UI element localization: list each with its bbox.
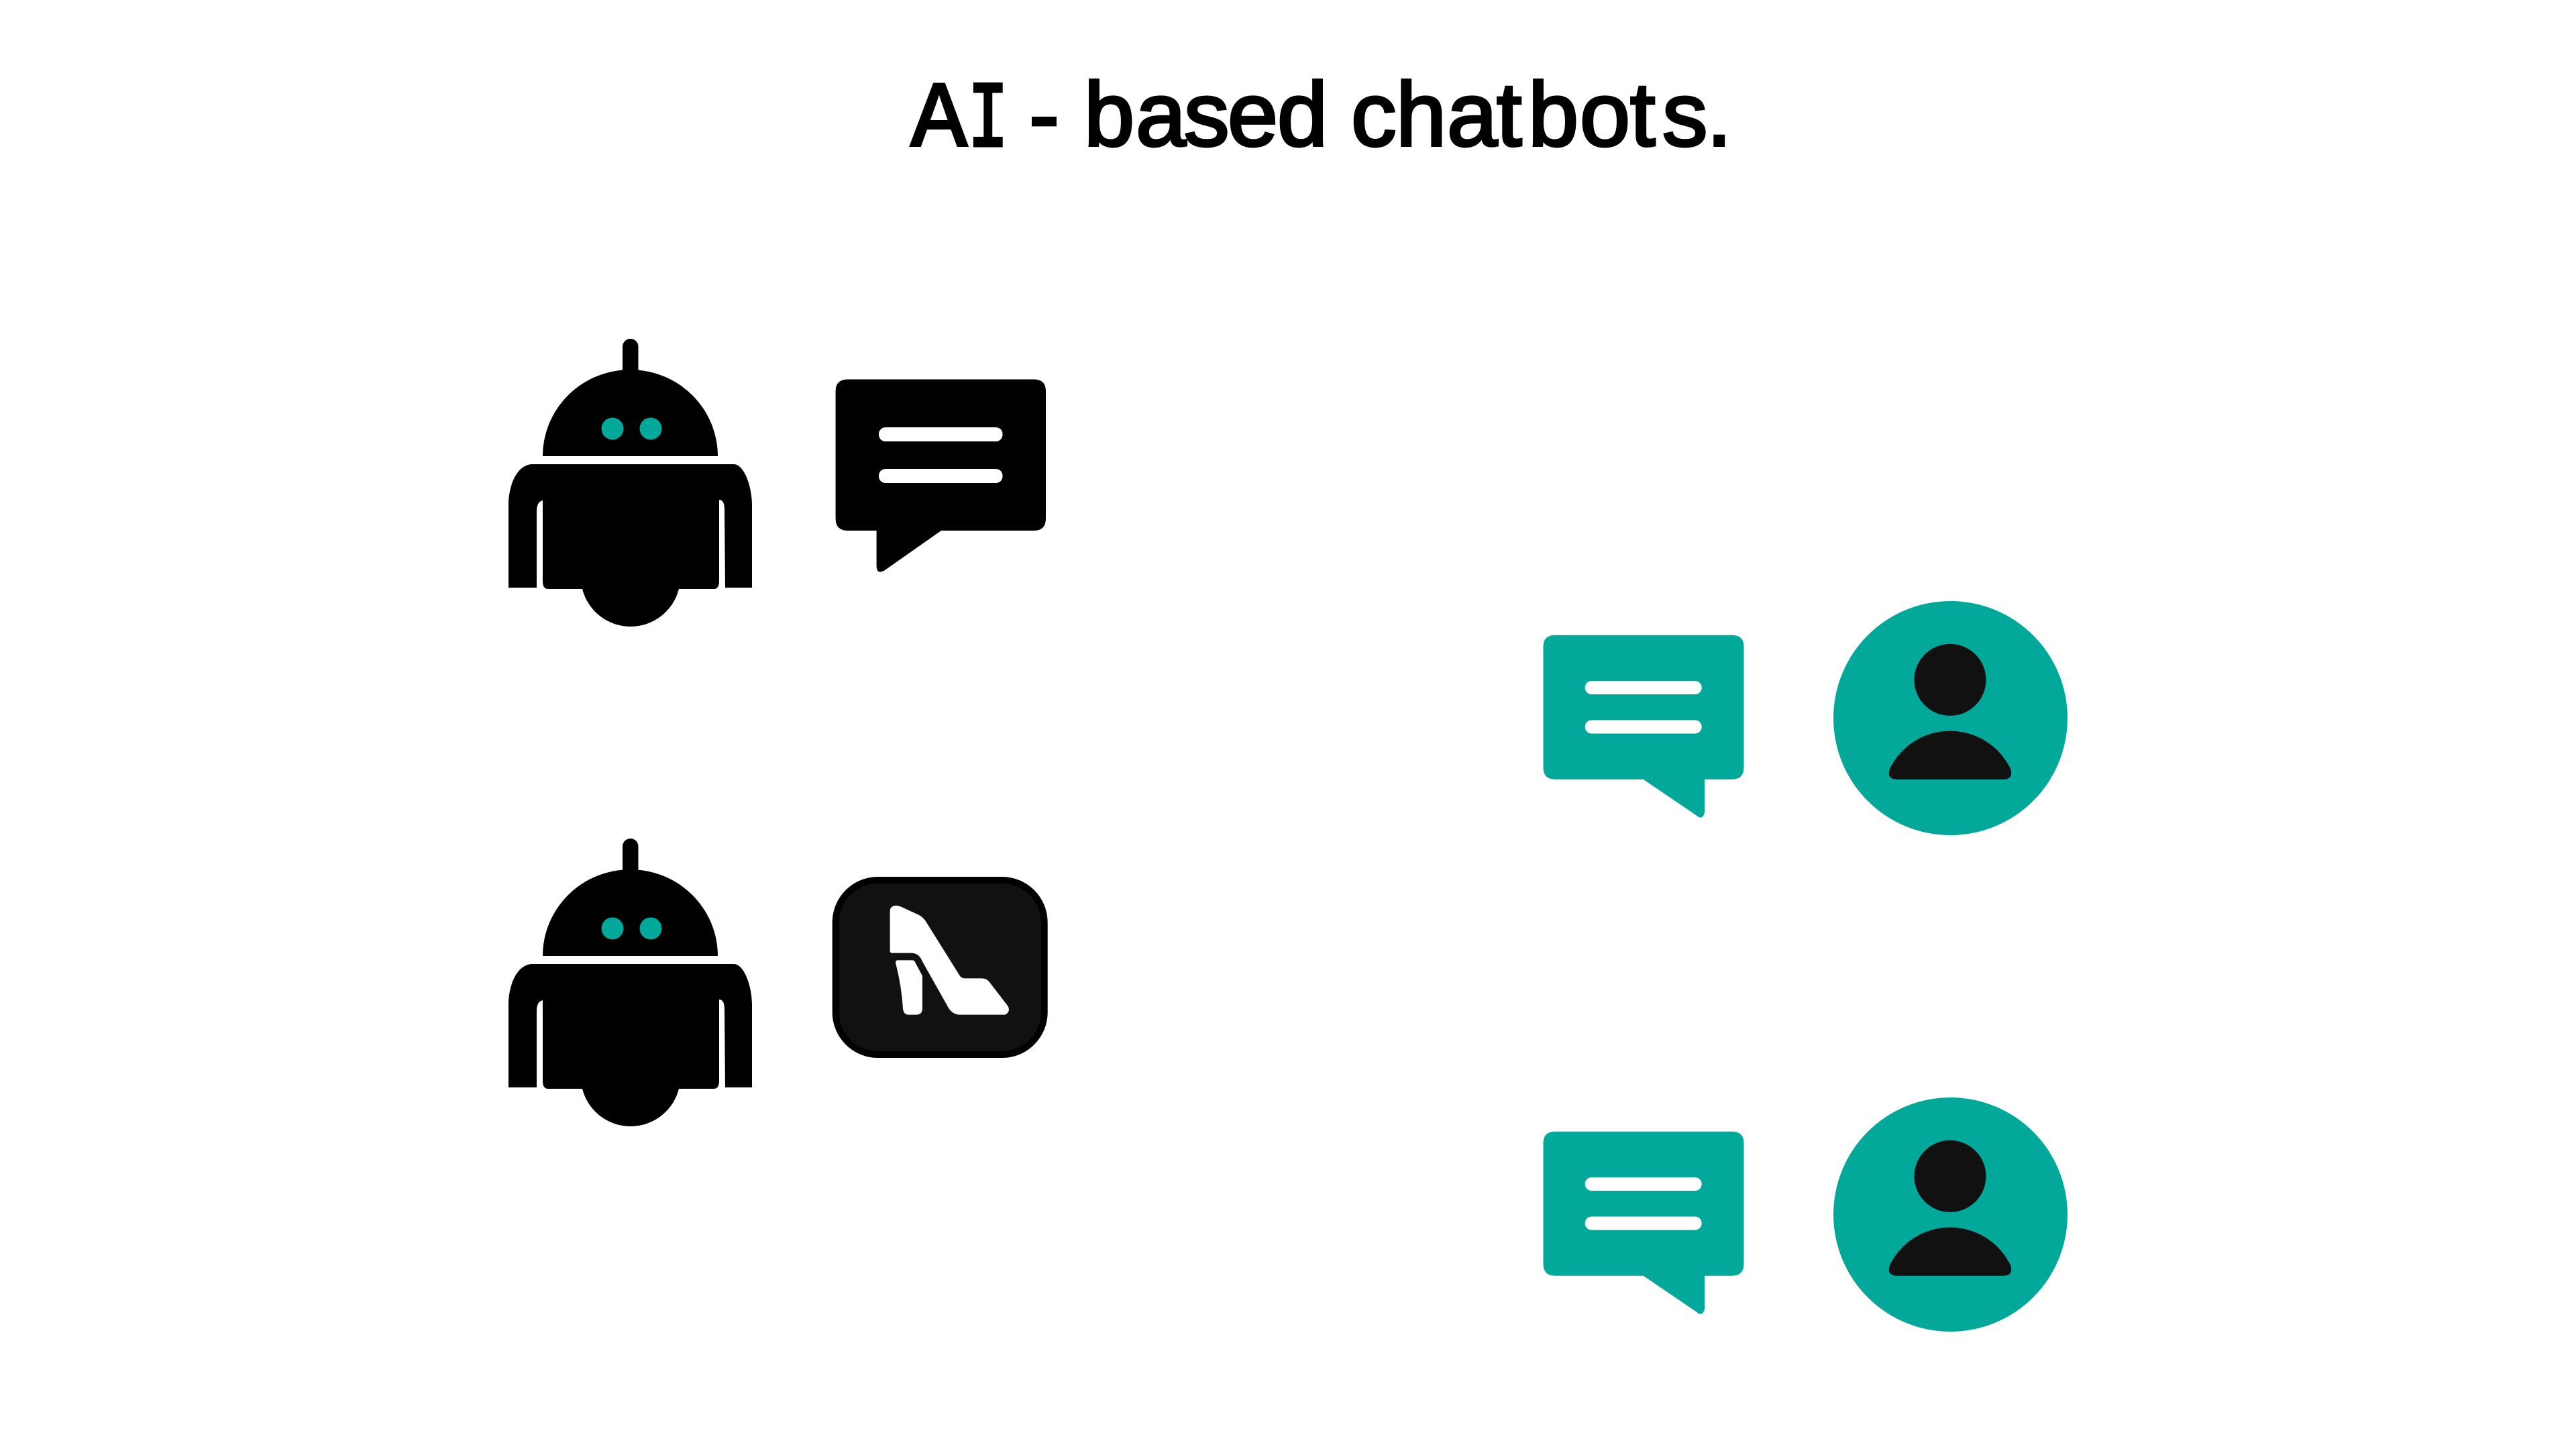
icon: teal speech bubble bottom	[1543, 1132, 1744, 1314]
icon: robot bottom	[508, 839, 752, 1126]
icon: black speech bubble	[836, 380, 1046, 572]
icon: robot top	[508, 339, 752, 627]
icon: high-heel shoe tile	[836, 880, 1044, 1055]
icon: user avatar top	[1833, 601, 2068, 835]
icon: user avatar bottom	[1833, 1097, 2068, 1332]
title: I	[968, 68, 1008, 174]
icon: teal speech bubble top	[1543, 635, 1744, 818]
title: A	[911, 68, 967, 174]
title: - based chatbots.	[1029, 64, 1732, 165]
